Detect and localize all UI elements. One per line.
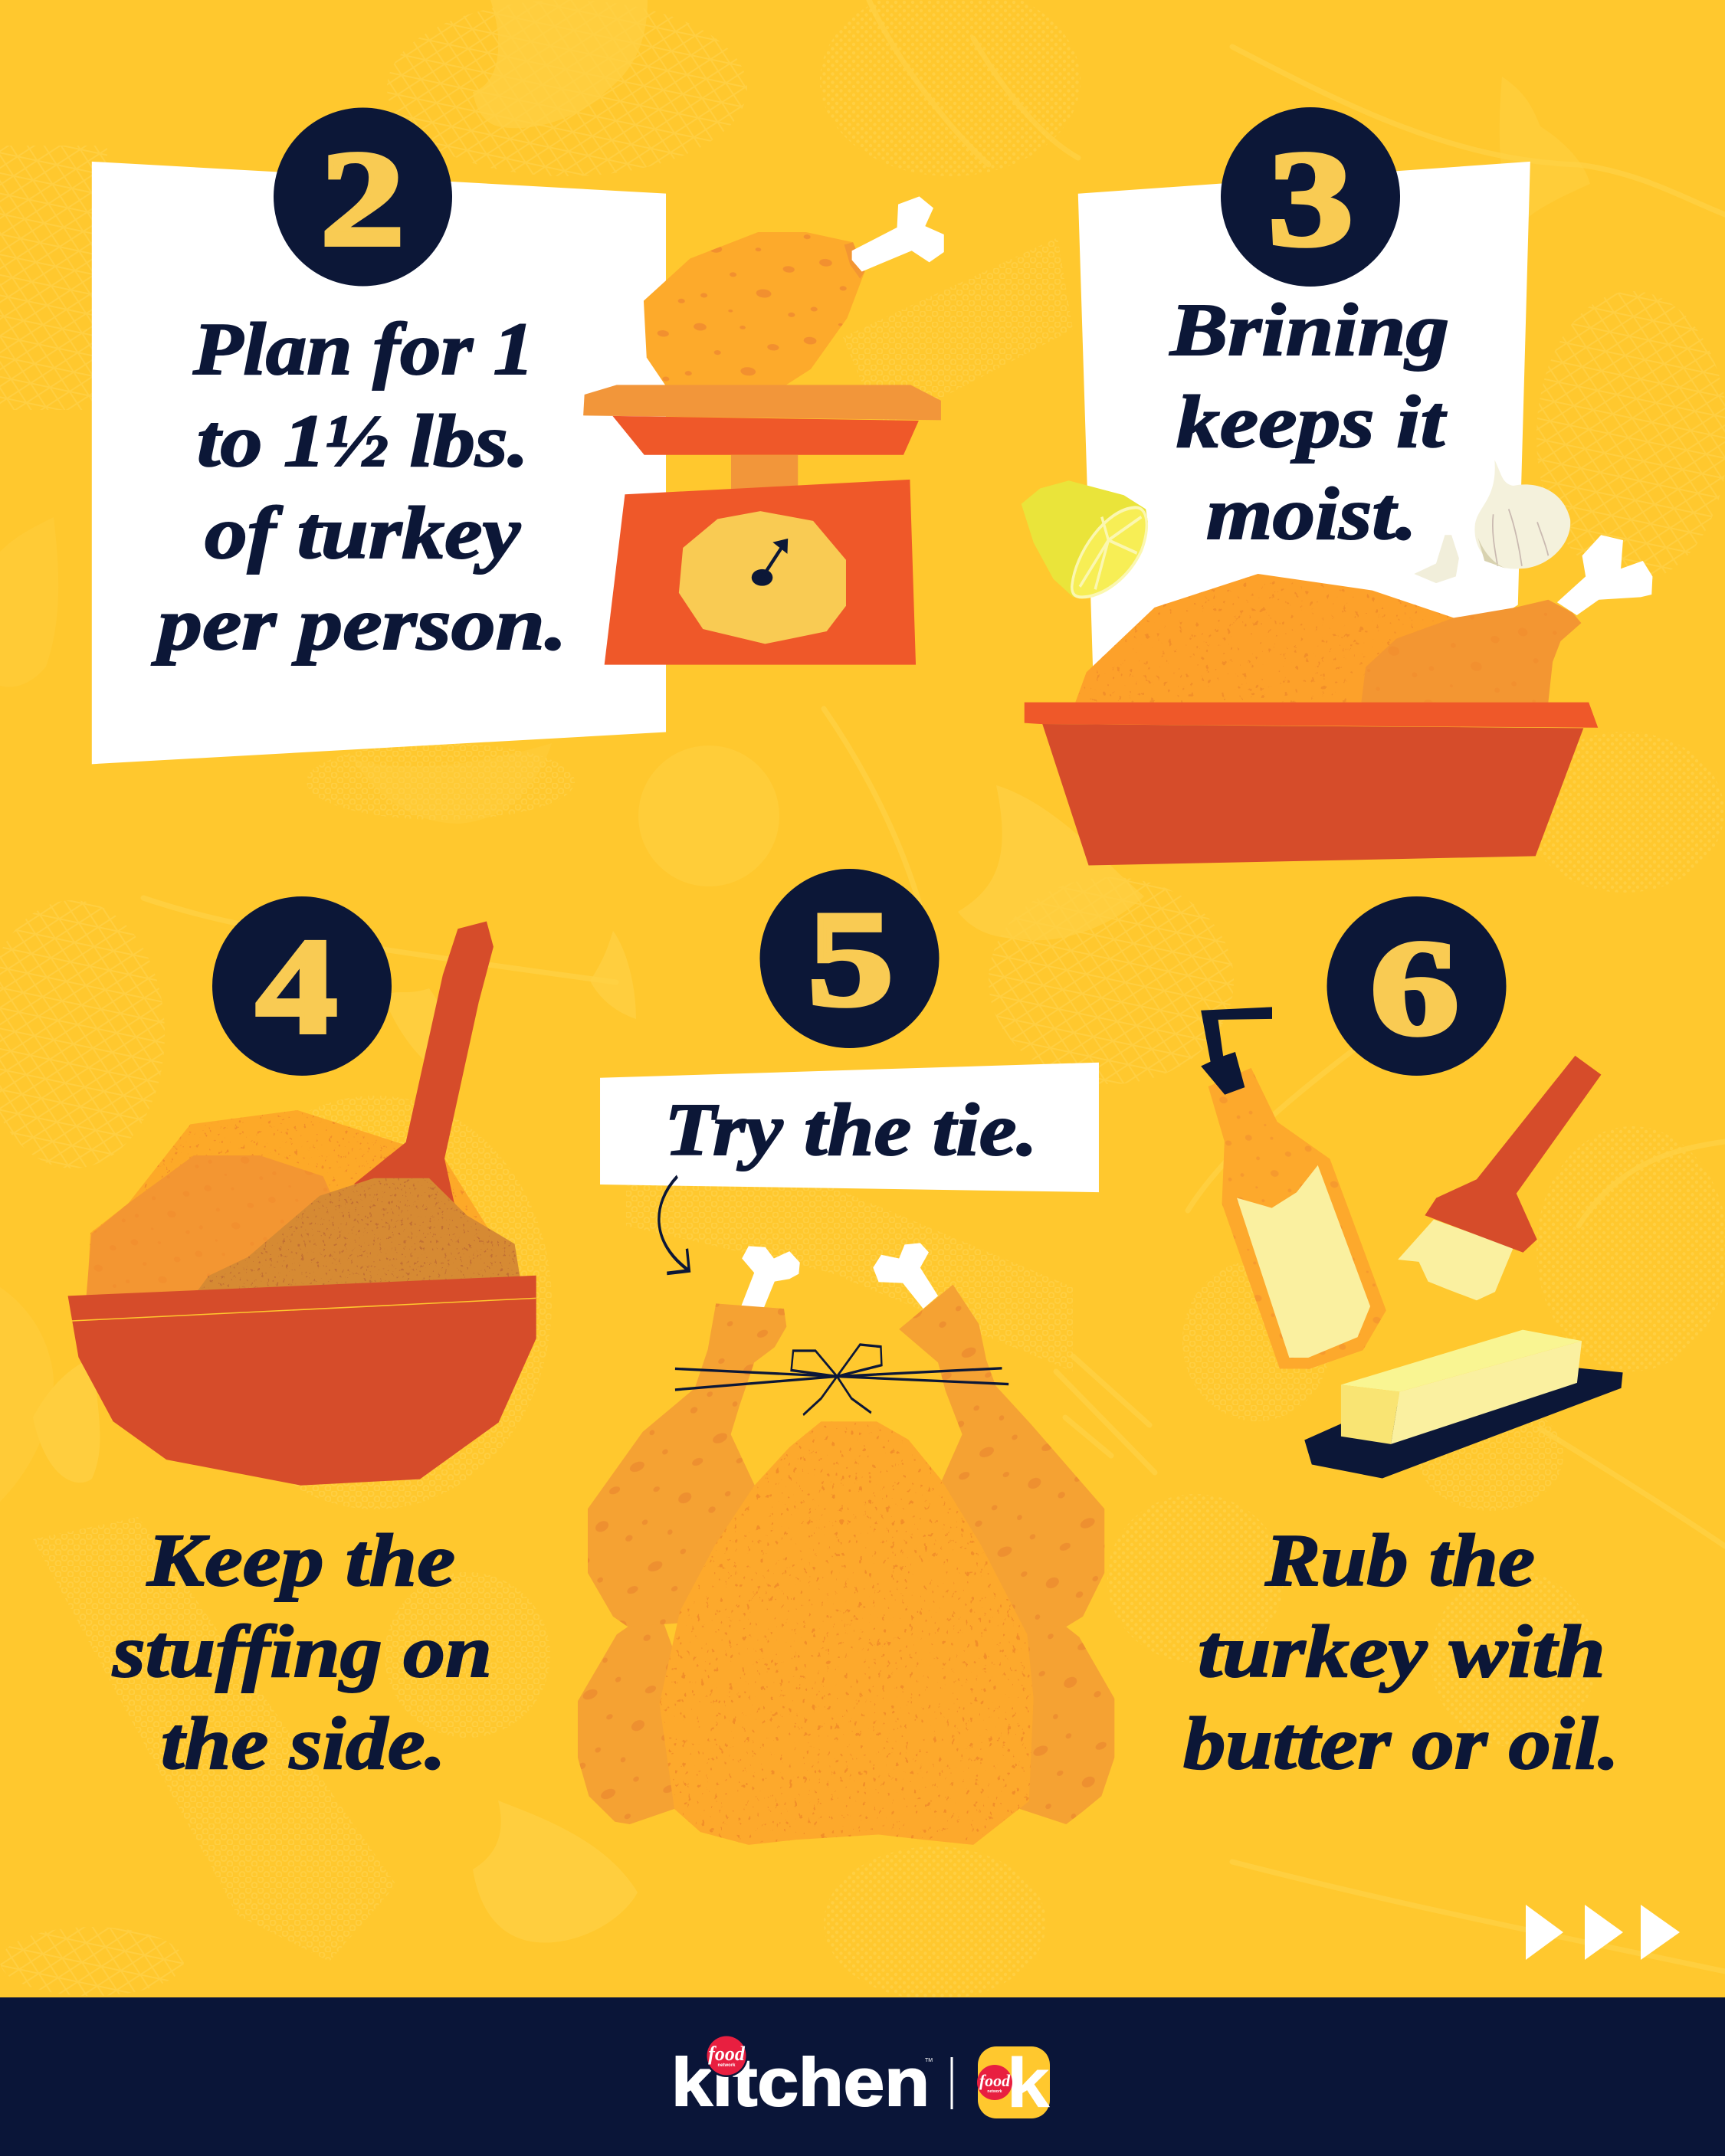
text: step 4: stuffing on [112, 1610, 492, 1693]
text: step 6: Rub the [1264, 1519, 1535, 1602]
text: step 2 [152, 308, 567, 666]
panel: step 2 [92, 107, 944, 764]
logo: food network kitchen: food [708, 2043, 746, 2065]
number badge 6 [1327, 896, 1507, 1076]
panel: step 4 [68, 896, 536, 1785]
number badge 3 [1221, 107, 1400, 287]
number badge 4 [212, 896, 392, 1076]
text: step 5: Try the tie. [664, 1089, 1038, 1171]
icon: oil bottle, brush and butter [1201, 1007, 1623, 1478]
logo: app icon: network [987, 2089, 1002, 2094]
text: step 3: moist. [1206, 473, 1417, 555]
text: step 3: keeps it [1176, 381, 1447, 464]
arrow [659, 1176, 689, 1273]
panel: step 3 [1022, 107, 1652, 866]
icon: turkey in pan with lemon and garlic [1022, 460, 1652, 866]
text: step 2: to 1½ lbs. [197, 400, 529, 483]
divider [950, 2057, 953, 2109]
banner [600, 1063, 1099, 1192]
number badge 6: 6 [1370, 912, 1459, 1063]
text: step 2: of turkey [205, 492, 521, 575]
logo: food network kitchen: TM [925, 2058, 933, 2063]
text: step 6: turkey with [1198, 1610, 1605, 1693]
number badge 4: 4 [256, 910, 337, 1062]
panel: step 5 [578, 869, 1114, 1845]
card 3 [1078, 162, 1530, 672]
number badge 5 [760, 869, 940, 1048]
number badge 2 [274, 107, 452, 287]
logo: food network kitchen: network [717, 2063, 736, 2068]
footer bar [0, 1997, 1725, 2156]
icon: stuffing bowl with spoon [68, 922, 536, 1486]
icon: tied turkey [578, 1243, 1114, 1845]
number badge 3: 3 [1268, 123, 1353, 274]
text: step 2: Plan for 1 [192, 308, 534, 391]
logo: food network kitchen: kitchen [671, 2044, 930, 2120]
logo: app icon [977, 2044, 1051, 2122]
text: step 2: per person. [152, 583, 567, 666]
text: step 4: the side. [161, 1702, 446, 1785]
panel: step 6 [1183, 896, 1623, 1785]
number badge 2: 2 [320, 123, 405, 274]
text: step 4 [112, 1519, 492, 1785]
text: step 6: butter or oil. [1183, 1702, 1619, 1785]
icon: next arrows [1526, 1905, 1680, 1960]
text: step 6 [1183, 1519, 1619, 1785]
text: step 4: Keep the [146, 1519, 455, 1602]
text: step 3: Brining [1169, 289, 1449, 372]
logo: app icon: k [1006, 2044, 1051, 2122]
card 2 [92, 162, 666, 764]
logo: app icon: food [979, 2071, 1011, 2090]
icon: kitchen scale with drumstick [583, 196, 944, 665]
number badge 5: 5 [808, 883, 894, 1034]
text: step 3 [1169, 289, 1449, 555]
